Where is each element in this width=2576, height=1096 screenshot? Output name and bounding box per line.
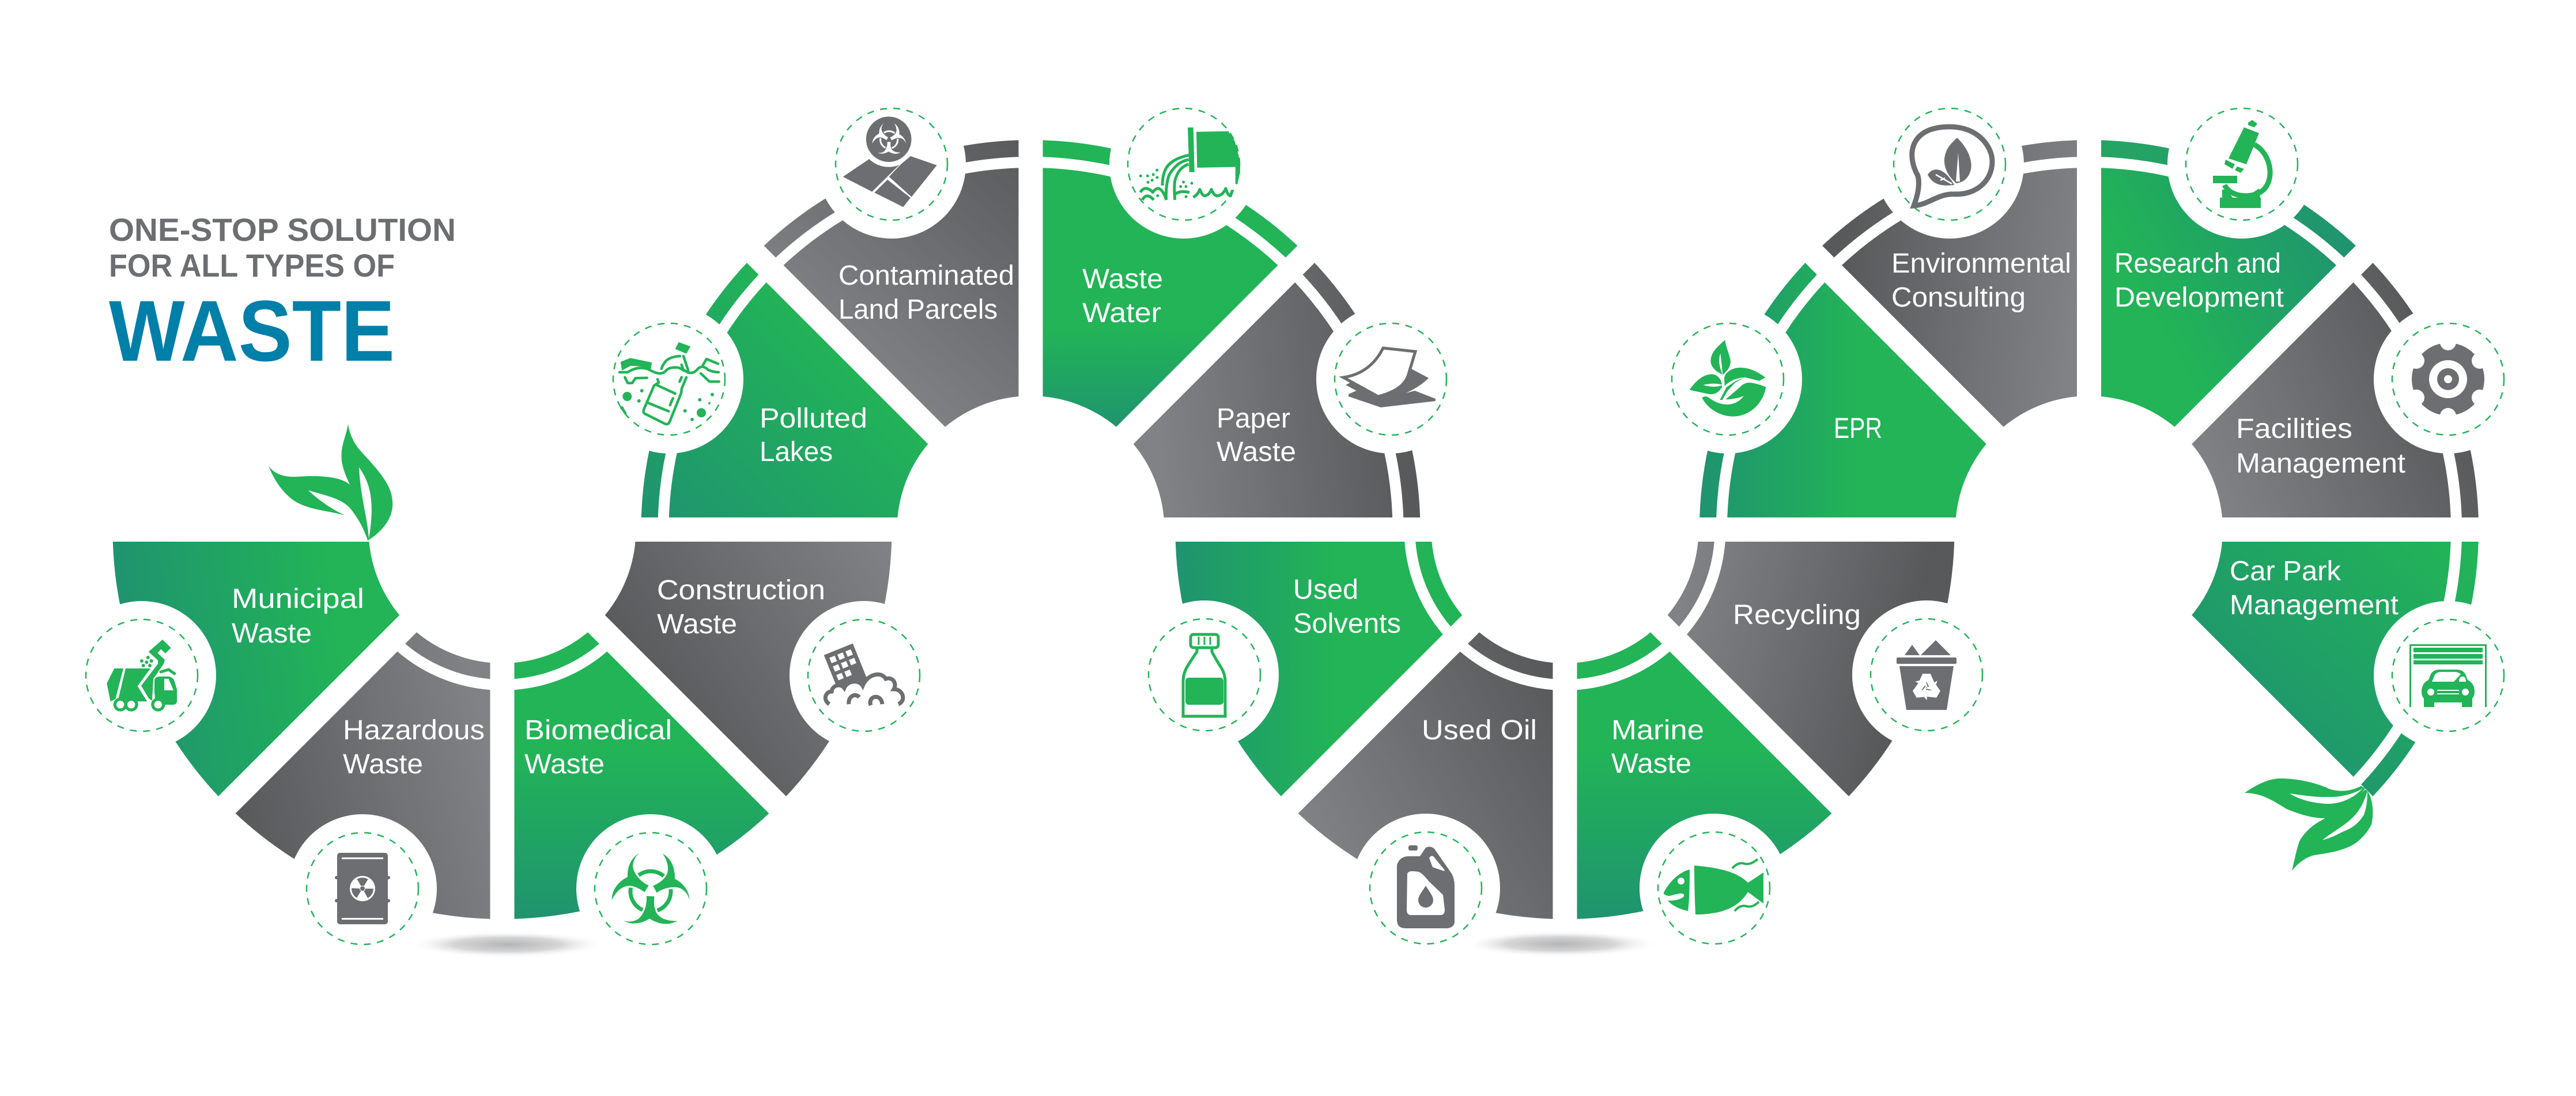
label: Recycling xyxy=(1733,600,1861,630)
segment xyxy=(2101,140,2356,427)
label xyxy=(657,575,825,640)
segment xyxy=(514,632,769,919)
label: Water xyxy=(1082,298,1161,328)
label xyxy=(760,403,867,467)
segment xyxy=(1298,632,1553,919)
segment xyxy=(1699,263,1986,517)
icon: leaf sprout at start xyxy=(269,424,392,541)
label xyxy=(1082,264,1163,328)
label: Solvents xyxy=(1293,609,1401,639)
shadow under first curve xyxy=(408,931,606,958)
segment xyxy=(1577,632,1831,919)
icon: leaf sprout at end xyxy=(2245,778,2373,871)
label xyxy=(232,584,364,649)
panel: Paper Waste xyxy=(1134,263,1465,517)
label: EPR xyxy=(1834,412,1882,444)
panel: Polluted Lakes xyxy=(595,263,928,517)
icon: oil jug xyxy=(1351,814,1500,962)
label xyxy=(2114,248,2284,313)
label: Land Parcels xyxy=(838,294,998,325)
icon: car in garage xyxy=(2374,601,2522,750)
panel: Recycling xyxy=(1668,542,2001,796)
label xyxy=(1217,403,1296,467)
label: Management xyxy=(2230,590,2399,621)
panel: Research and Development xyxy=(2101,90,2356,427)
label xyxy=(838,260,1014,325)
label xyxy=(1293,575,1401,639)
label: Used xyxy=(1293,575,1358,605)
panel: Municipal Waste xyxy=(67,542,399,796)
segment xyxy=(113,542,399,796)
panel: Biomedical Waste xyxy=(514,632,769,963)
label: Waste xyxy=(343,749,423,780)
label: Waste xyxy=(1611,749,1691,779)
label: Waste xyxy=(1217,437,1296,467)
icon: gear xyxy=(2374,305,2522,453)
panel: Used Solvents xyxy=(1130,542,1462,796)
segment xyxy=(764,140,1019,427)
segment xyxy=(2192,263,2479,517)
label xyxy=(1891,248,2071,313)
panel: Marine Waste xyxy=(1577,632,1831,962)
label: Facilities xyxy=(2236,414,2352,444)
panel: Hazardous Waste xyxy=(236,632,490,963)
label: Contaminated xyxy=(838,260,1014,291)
shadow under second curve xyxy=(1461,931,1660,957)
panel: EPR xyxy=(1653,263,1986,517)
icon: collapsing building xyxy=(790,601,938,750)
segment xyxy=(236,632,490,919)
label: Waste xyxy=(232,618,312,649)
label xyxy=(1611,715,1704,779)
label: Used Oil xyxy=(1422,715,1537,746)
icon: polluted water with bottle xyxy=(595,305,743,453)
label: Car Park xyxy=(2230,556,2341,587)
panel: Environmental Consulting xyxy=(1822,90,2077,427)
label xyxy=(2230,556,2399,621)
title line 1: ONE-STOP SOLUTION xyxy=(109,211,456,248)
icon: solvent bottle xyxy=(1130,600,1279,749)
segment xyxy=(1822,140,2077,427)
icon: leaf speech bubble xyxy=(1875,90,2024,239)
title: one-stop solution for all types of waste xyxy=(109,211,456,379)
label xyxy=(2236,414,2405,479)
label: Biomedical xyxy=(524,715,672,746)
label: Environmental xyxy=(1891,248,2071,279)
label: Polluted xyxy=(760,403,867,434)
panel: Car Park Management xyxy=(2192,542,2522,796)
icon: waste water outlet xyxy=(1109,90,1258,239)
icon: biohazard xyxy=(576,814,725,963)
segment xyxy=(1176,542,1462,796)
icon: fish xyxy=(1640,814,1788,962)
icon: plant in hand xyxy=(1653,305,1802,453)
label: Development xyxy=(2114,282,2284,313)
segment xyxy=(641,263,928,517)
label: Waste xyxy=(657,609,737,640)
label: Municipal xyxy=(232,584,364,614)
label: Construction xyxy=(657,575,825,606)
label xyxy=(343,715,485,780)
title line 2: FOR ALL TYPES OF xyxy=(109,247,395,284)
label: Waste xyxy=(524,749,605,780)
label: Paper xyxy=(1217,403,1290,434)
label: Research and xyxy=(2114,248,2281,279)
icon: contaminated land xyxy=(817,90,966,239)
icon: recycling bin xyxy=(1852,600,2001,749)
label: Consulting xyxy=(1891,282,2026,313)
segment xyxy=(1668,542,1954,796)
icon: paper stack xyxy=(1316,305,1465,453)
panel: Contaminated Land Parcels xyxy=(764,90,1019,427)
icon: garbage truck xyxy=(67,601,216,750)
panel: Used Oil xyxy=(1298,632,1553,962)
label xyxy=(524,715,672,780)
label: Hazardous xyxy=(343,715,485,746)
label: Marine xyxy=(1611,715,1704,746)
panel: Construction Waste xyxy=(605,542,938,796)
icon: radioactive barrel xyxy=(288,814,437,963)
segment xyxy=(1043,140,1297,427)
title word: WASTE: WASTE xyxy=(109,282,395,379)
label: Waste xyxy=(1082,264,1163,294)
panel: Waste Water xyxy=(1043,90,1297,427)
segment xyxy=(1134,263,1420,517)
icon: microscope xyxy=(2167,90,2316,239)
segment xyxy=(2192,542,2479,796)
segment xyxy=(605,542,892,796)
panel: Facilities Management xyxy=(2192,263,2522,517)
label: Management xyxy=(2236,448,2405,479)
label: Lakes xyxy=(760,437,833,467)
